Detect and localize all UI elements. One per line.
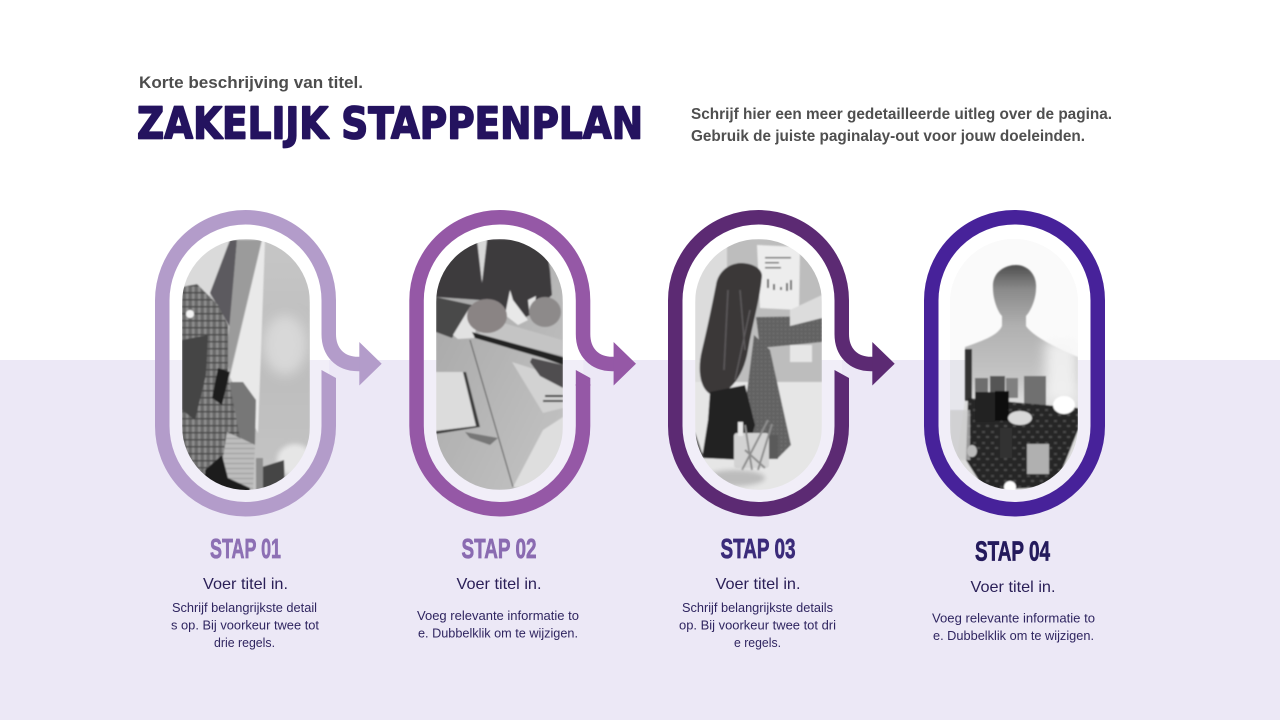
step 3 body: op. Bij voorkeur twee tot dri <box>679 618 836 632</box>
step 2 body: e. Dubbelklik om te wijzigen. <box>418 626 578 640</box>
step 3 label: STAP 03 <box>720 533 796 564</box>
step 4 body <box>932 610 1095 643</box>
step 4 body: Voeg relevante informatie to <box>932 610 1095 626</box>
step 2 label: STAP 02 <box>462 533 536 564</box>
step 3 body <box>679 600 836 650</box>
title: ZAKELIJK STAPPENPLAN <box>137 100 643 150</box>
step 4 heading: Voer titel in. <box>970 579 1056 596</box>
panel: step 3 <box>675 217 895 509</box>
ring with arrow: step 3 <box>675 217 895 509</box>
background: lavender band <box>0 360 1280 720</box>
step 4 body: e. Dubbelklik om te wijzigen. <box>933 628 1094 643</box>
background: white top <box>0 0 1280 360</box>
step 2 body: Voeg relevante informatie to <box>417 608 579 623</box>
photo: silhouette with city <box>950 264 1078 490</box>
ring: step 4 <box>931 217 1098 509</box>
step 2 heading: Voer titel in. <box>456 576 542 593</box>
step 1 body: s op. Bij voorkeur twee tot <box>171 618 319 632</box>
photo: hands and documents <box>436 239 563 490</box>
step 3 body: e regels. <box>734 635 781 650</box>
step 4 label: STAP 04 <box>975 536 1050 566</box>
step 3 text <box>679 533 836 650</box>
photo: woman at presentation board <box>695 239 822 490</box>
step 1 text <box>171 533 319 650</box>
subtitle: Korte beschrijving van titel. <box>139 74 363 92</box>
photo: skyscrapers <box>182 239 313 492</box>
ring with arrow: step 2 <box>416 217 636 509</box>
page description <box>691 106 1112 145</box>
step 1 body: Schrijf belangrijkste detail <box>172 600 317 615</box>
step 1 label: STAP 01 <box>210 533 281 564</box>
ring with arrow: step 1 <box>162 217 382 509</box>
step 4 text <box>932 536 1095 643</box>
step 1 body <box>171 600 319 650</box>
panel: step 1 <box>162 217 382 509</box>
step 3 heading: Voer titel in. <box>716 576 800 593</box>
panel: step 4 <box>931 217 1098 509</box>
step 2 text <box>417 533 579 640</box>
panel: step 2 <box>416 217 636 509</box>
step 1 body: drie regels. <box>214 635 275 650</box>
page description: Gebruik de juiste paginalay-out voor jouw doeleinden. <box>691 128 1085 145</box>
page description: Schrijf hier een meer gedetailleerde uitleg over de pagina. <box>691 106 1112 123</box>
step 1 heading: Voer titel in. <box>203 576 288 593</box>
step 3 body: Schrijf belangrijkste details <box>682 600 833 615</box>
step 2 body <box>417 608 579 640</box>
